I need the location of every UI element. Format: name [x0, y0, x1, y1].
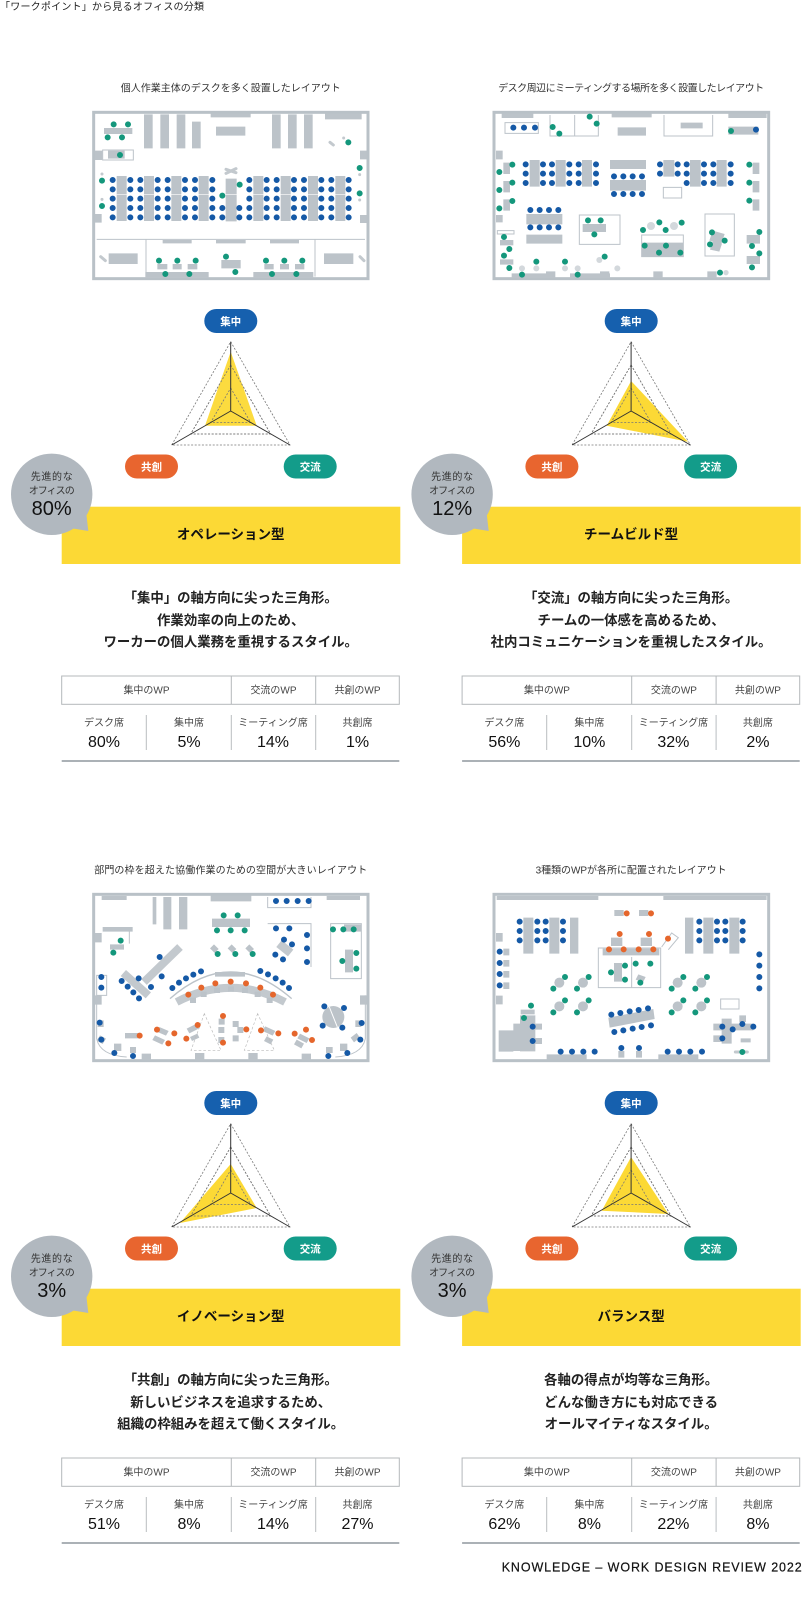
pill: 集中 — [605, 309, 658, 333]
speech bubble: 3%: 先進的な — [431, 1252, 473, 1265]
panel: バランス型 — [411, 864, 801, 1543]
description — [103, 590, 358, 650]
WP table: ミーティング席 — [238, 1498, 308, 1511]
description: 新しいビジネスを追求するため、 — [130, 1394, 331, 1410]
WP table: 共創席 — [342, 717, 372, 729]
type band — [462, 507, 801, 564]
WP table: 10% — [573, 734, 605, 751]
WP table: デスク席 — [484, 1498, 524, 1511]
speech bubble: 80%: 80% — [32, 498, 72, 520]
panel: イノベーション型 — [11, 864, 400, 1543]
pill: 共創: 共創 — [141, 1242, 162, 1256]
heading: layout description: デスク周辺にミーティングする場所を多く設置したレイアウト — [498, 82, 764, 94]
WP table: 交流のWP — [651, 684, 697, 696]
speech bubble: 12% — [411, 454, 493, 535]
WP table: 8% — [578, 1516, 601, 1533]
WP table: 32% — [657, 734, 689, 751]
pill: 交流: 交流 — [300, 460, 321, 474]
pill: 共創 — [125, 1236, 178, 1260]
WP table: 51% — [88, 1516, 120, 1533]
type band — [62, 507, 400, 564]
speech bubble: 80%: オフィスの — [29, 485, 75, 497]
WP table: 22% — [657, 1516, 689, 1533]
description: どんな働き方にも対応できる — [544, 1394, 718, 1410]
WP table: ミーティング席 — [238, 716, 308, 729]
title: 「ワークポイント」から見るオフィスの分類 — [0, 1, 204, 13]
WP table: 集中席 — [174, 716, 204, 729]
pill: 交流: 交流 — [700, 1242, 722, 1256]
WP table: 5% — [177, 734, 201, 751]
pill: 共創: 共創 — [141, 460, 162, 474]
WP table: 交流のWP — [250, 684, 297, 696]
description: 組織の枠組みを超えて働くスタイル。 — [117, 1416, 344, 1432]
description — [117, 1372, 344, 1432]
pill: 共創: 共創 — [541, 460, 562, 474]
WP table: 交流のWP — [651, 1466, 697, 1478]
pill: 集中 — [605, 1091, 658, 1115]
WP table: 集中席 — [574, 1498, 604, 1511]
pill: 共創: 共創 — [541, 1242, 562, 1256]
speech bubble: 3%: 先進的な — [31, 1252, 73, 1265]
pill: 共創 — [525, 454, 578, 478]
description: チームの一体感を高めるため、 — [538, 612, 725, 628]
speech bubble: 3%: オフィスの — [429, 1267, 475, 1279]
type band — [62, 1289, 400, 1346]
WP table — [62, 676, 399, 761]
WP table: 共創席 — [342, 1499, 372, 1511]
speech bubble: 3%: 3% — [438, 1280, 467, 1302]
speech bubble: 80%: 先進的な — [31, 470, 73, 483]
WP table: 集中席 — [574, 716, 604, 729]
WP table: 集中のWP — [123, 684, 170, 696]
type name: オペレーション型 — [177, 527, 285, 542]
description: 「共創」の軸方向に尖った三角形。 — [124, 1372, 338, 1388]
description: 各軸の得点が均等な三角形。 — [544, 1372, 718, 1388]
WP table: 共創席 — [743, 717, 773, 729]
heading: layout description: 部門の枠を超えた協働作業のための空間が大きいレイアウト — [94, 864, 367, 876]
speech bubble: 12%: 先進的な — [431, 470, 473, 483]
WP table: 8% — [177, 1516, 201, 1533]
description — [491, 590, 772, 650]
description: ワーカーの個人業務を重視するスタイル。 — [103, 634, 358, 650]
WP table: 共創のWP — [334, 1466, 381, 1478]
WP table — [62, 1458, 399, 1543]
speech bubble: 12%: 12% — [432, 498, 472, 520]
pill: 集中 — [204, 309, 257, 333]
WP table: 2% — [746, 734, 769, 751]
floor plan: operation — [94, 112, 368, 279]
description — [544, 1372, 718, 1432]
WP table: デスク席 — [84, 1498, 124, 1511]
WP table: 集中のWP — [524, 684, 570, 696]
WP table: 56% — [488, 734, 520, 751]
WP table: 共創のWP — [334, 684, 381, 696]
radar chart — [172, 342, 290, 445]
speech bubble: 3% — [11, 1236, 92, 1317]
pill: 交流 — [284, 454, 337, 478]
WP table: 集中席 — [174, 1498, 204, 1511]
pill: 交流: 交流 — [700, 460, 722, 474]
speech bubble: 80% — [11, 454, 92, 535]
WP table: 80% — [88, 734, 120, 751]
WP table: 集中のWP — [123, 1466, 170, 1478]
type name: バランス型 — [597, 1309, 665, 1324]
panel: チームビルド型 — [411, 82, 801, 761]
WP table: ミーティング席 — [639, 716, 708, 729]
floor plan: team build — [494, 112, 769, 279]
WP table — [462, 1458, 800, 1543]
type name: チームビルド型 — [584, 526, 678, 542]
type name: イノベーション型 — [177, 1309, 285, 1324]
WP table: 14% — [257, 1516, 289, 1533]
radar chart — [172, 1124, 290, 1227]
pill: 共創 — [525, 1236, 578, 1260]
pill: 集中 — [204, 1091, 257, 1115]
floor plan: innovation — [94, 894, 368, 1061]
heading: layout description: 個人作業主体のデスクを多く設置したレイアウト — [121, 82, 341, 94]
pill: 交流 — [684, 1236, 737, 1260]
speech bubble: 3%: 3% — [37, 1280, 66, 1302]
panel: オペレーション型 — [11, 82, 400, 761]
description: オールマイティなスタイル。 — [545, 1416, 718, 1432]
WP table: 1% — [346, 734, 369, 751]
WP table: デスク席 — [484, 716, 524, 729]
WP table — [462, 676, 800, 761]
WP table: 27% — [341, 1516, 374, 1533]
pill: 集中: 集中 — [220, 1097, 241, 1110]
pill: 集中: 集中 — [220, 315, 241, 328]
pill: 交流 — [684, 454, 737, 478]
speech bubble: 3% — [411, 1236, 493, 1317]
speech bubble: 12%: オフィスの — [429, 485, 475, 497]
WP table: 共創席 — [743, 1499, 773, 1511]
pill: 交流: 交流 — [300, 1242, 321, 1256]
pill: 交流 — [284, 1236, 337, 1260]
WP table: ミーティング席 — [639, 1498, 708, 1511]
description: 作業効率の向上のため、 — [157, 612, 304, 628]
WP table: 8% — [746, 1516, 769, 1533]
description: 社内コミュニケーションを重視したスタイル。 — [491, 634, 772, 650]
pill: 集中: 集中 — [621, 315, 642, 328]
WP table: 集中のWP — [524, 1466, 570, 1478]
pill: 集中: 集中 — [621, 1097, 642, 1110]
radar chart — [572, 1124, 690, 1227]
WP table: 共創のWP — [735, 684, 781, 696]
footer credit: KNOWLEDGE – WORK DESIGN REVIEW 2022 — [502, 1560, 802, 1574]
type band — [462, 1289, 801, 1346]
description: 「集中」の軸方向に尖った三角形。 — [124, 590, 338, 606]
pill: 共創 — [125, 454, 178, 478]
WP table: 62% — [488, 1516, 520, 1533]
heading: layout description: 3種類のWPが各所に配置されたレイアウト — [536, 864, 727, 876]
radar chart — [572, 342, 690, 445]
WP table: 14% — [257, 734, 289, 751]
floor plan: balance — [494, 894, 769, 1061]
WP table: デスク席 — [84, 716, 124, 729]
WP table: 交流のWP — [250, 1466, 297, 1478]
WP table: 共創のWP — [735, 1466, 781, 1478]
speech bubble: 3%: オフィスの — [29, 1267, 75, 1279]
description: 「交流」の軸方向に尖った三角形。 — [524, 590, 738, 606]
